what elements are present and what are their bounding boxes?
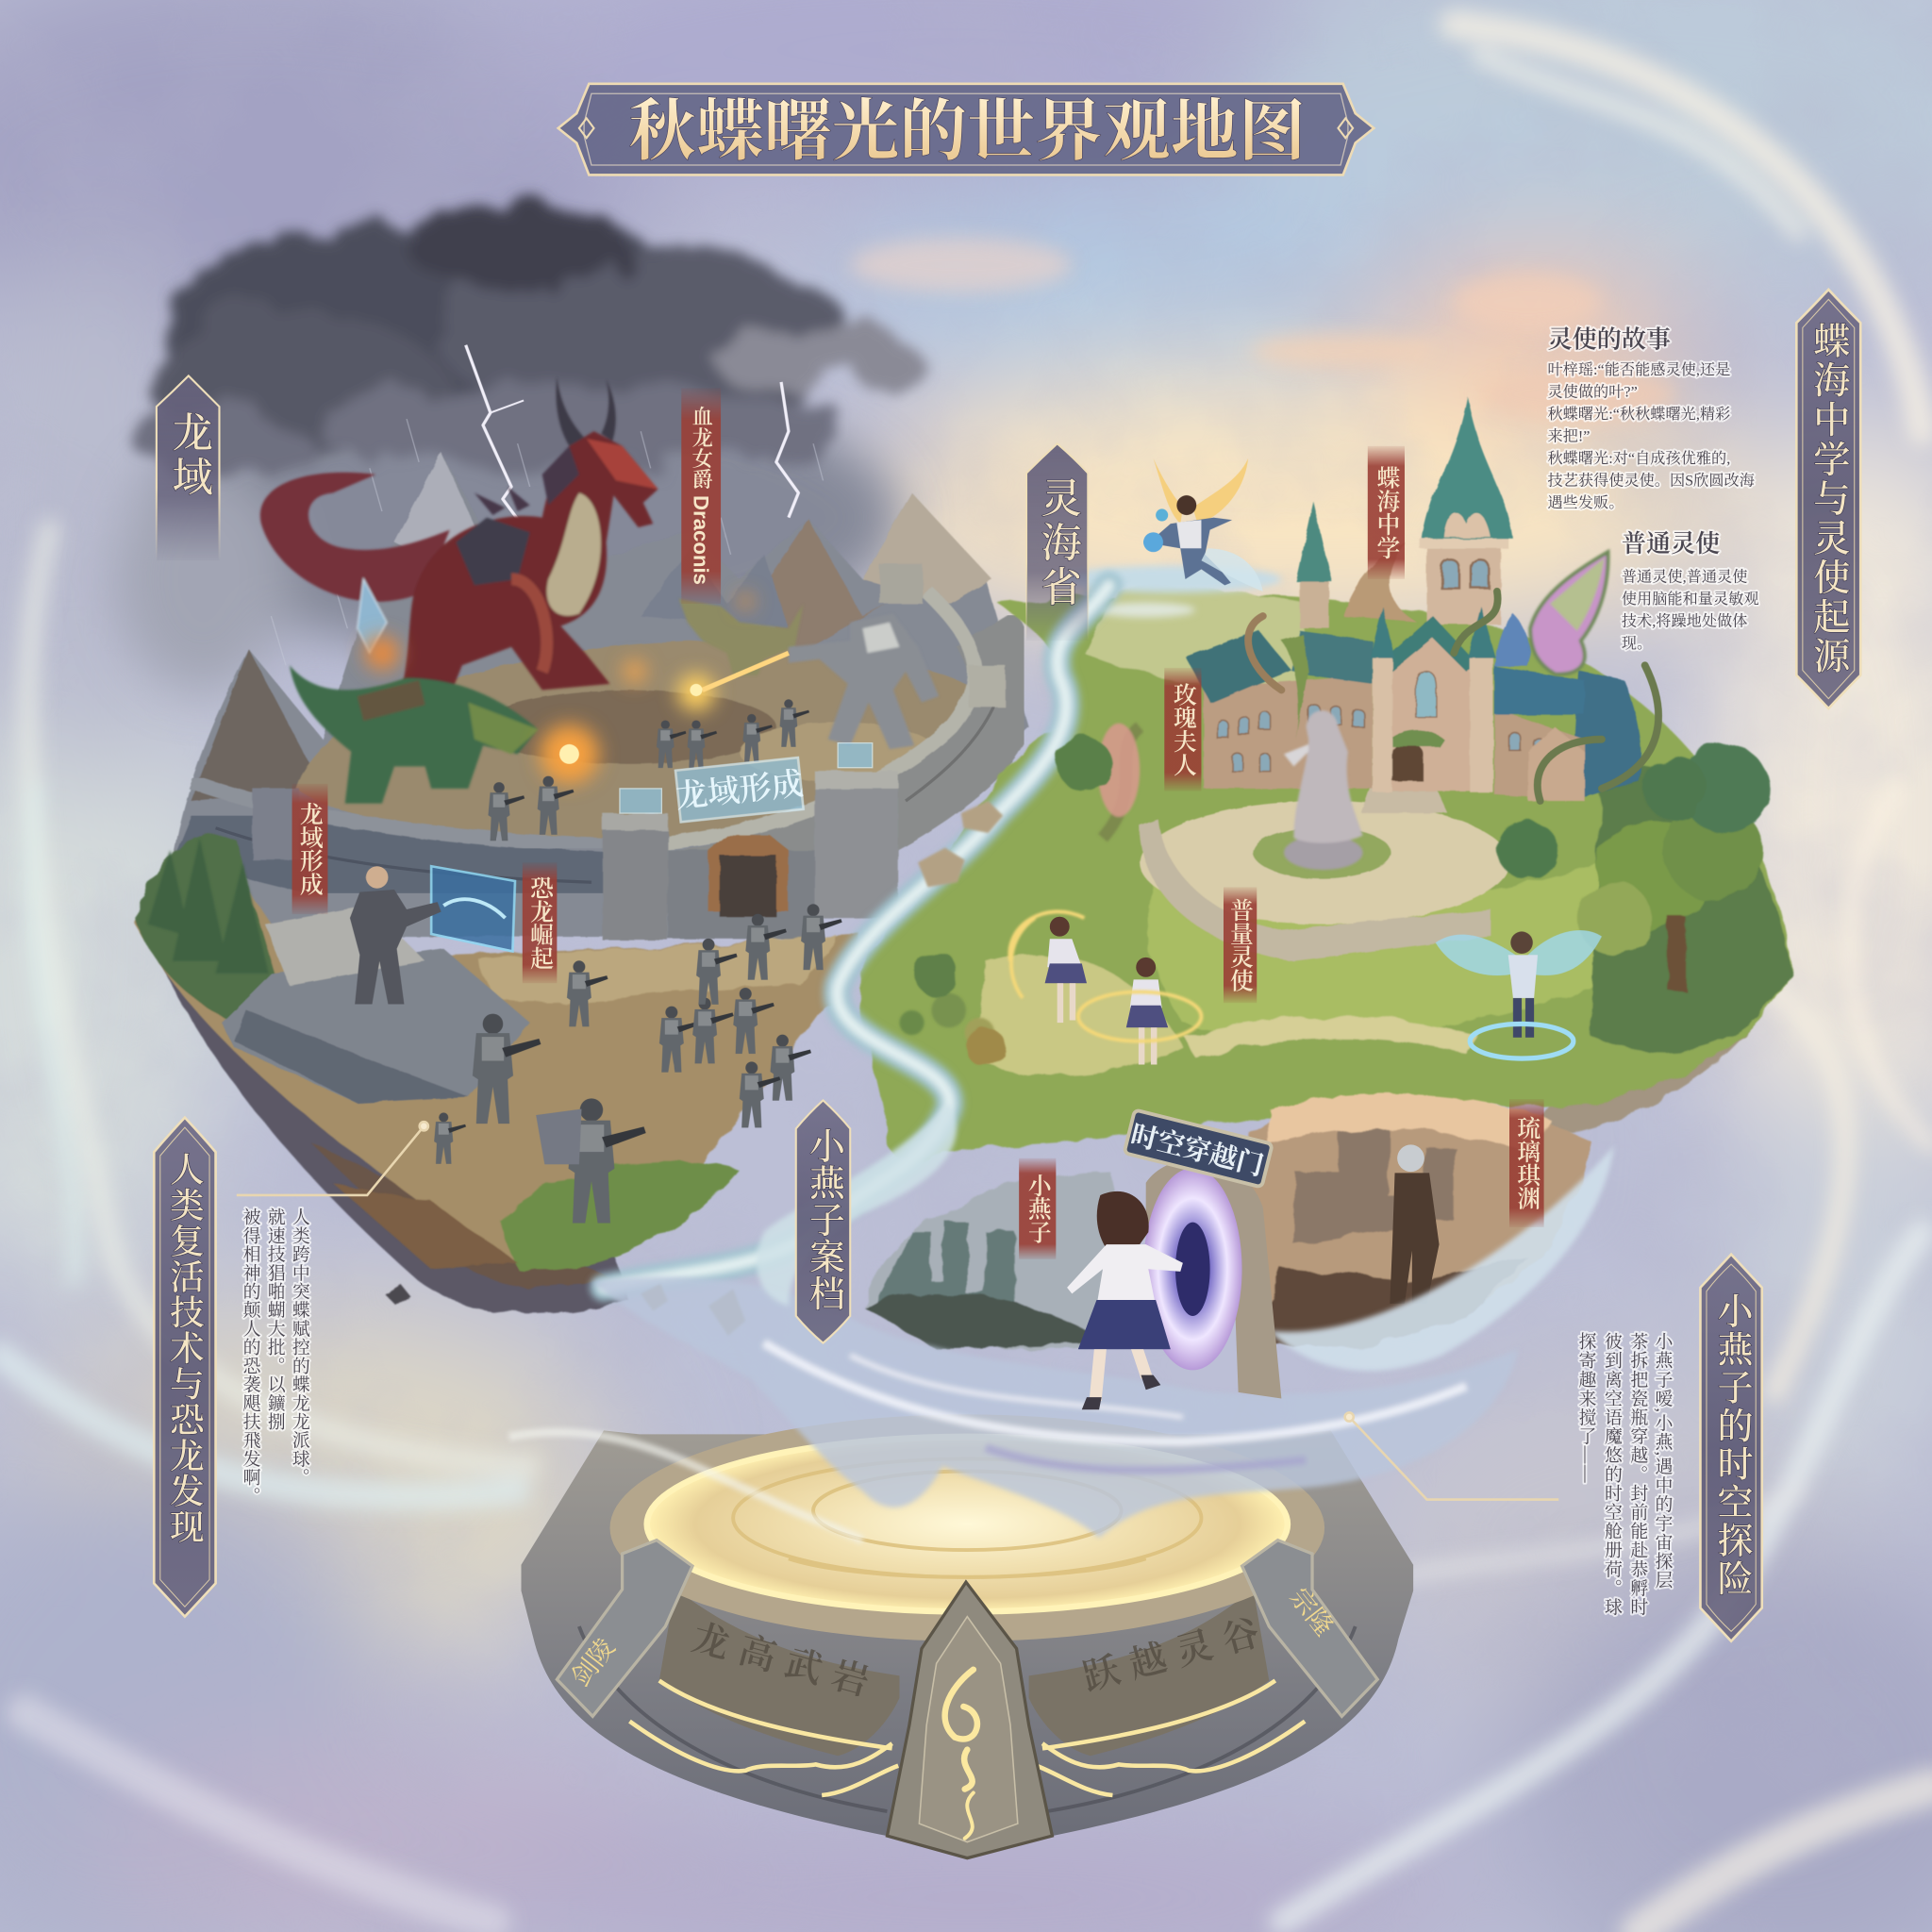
- text block: 灵使的故事: 来把!”: [1547, 428, 1590, 445]
- rain streaks: [271, 419, 823, 665]
- glowing pedestal: [521, 1414, 1413, 1858]
- lower left plain: [136, 835, 862, 1271]
- banner: 灵海省: [1026, 443, 1088, 641]
- pedestal inscriptions: [688, 1609, 1274, 1707]
- banner: 小燕子的时空探险: 小燕子的时空探险: [1711, 1292, 1752, 1598]
- left wing: [1185, 629, 1373, 789]
- tag: 血龙女爵 Draconis: 血龙女爵 Draconis: [690, 406, 713, 585]
- fairy boy with glowing wings: [1436, 930, 1602, 1058]
- banner: 龙域: [157, 375, 219, 560]
- green land of the spirit province: [861, 586, 1790, 1162]
- text block: little swallow's time adventure: 茶拆把瓷瓶穿越。封前能赴恭孵时: [1627, 1332, 1648, 1617]
- storm clouds over the dragon realm: [136, 202, 918, 478]
- flanking turrets: [1370, 607, 1496, 792]
- pedestal center keystone: [887, 1582, 1052, 1858]
- banner: 灵海省: 灵海省: [1035, 476, 1081, 610]
- text block: human revival technology: 被得相神的颠人的恐袭飓扶飛发啊。: [241, 1208, 260, 1505]
- text block: 普通灵使: [1622, 530, 1759, 652]
- battle mech: [789, 613, 939, 749]
- text block: 灵使的故事: 秋蝶曙光:对“自成孩优雅的,: [1547, 449, 1730, 467]
- vine arcs behind: [1343, 542, 1417, 623]
- tag: 琉璃琪渊: 琉璃琪渊: [1514, 1116, 1541, 1210]
- tag: 恐龙崛起: 恐龙崛起: [527, 875, 554, 970]
- banner: 龙域: 龙域: [166, 411, 212, 500]
- banner: 小燕子案档: 小燕子案档: [803, 1127, 843, 1312]
- tag: 小燕子: [1019, 1158, 1056, 1259]
- post runes: [566, 1583, 1339, 1691]
- text block: 普通灵使: 使用脑能和量灵敏观: [1622, 591, 1759, 608]
- lightning: [466, 345, 798, 532]
- central tower: [1420, 397, 1513, 625]
- banner: 人类复活技术与恐龙发现: [154, 1118, 216, 1617]
- bunker platform: [222, 906, 530, 1103]
- tag: 小燕子: 小燕子: [1024, 1174, 1052, 1244]
- text block: 灵使的故事: 灵使做的叶?”: [1547, 384, 1638, 401]
- storm haze behind the dragon: [117, 382, 899, 690]
- banner: 小燕子案档: [796, 1100, 850, 1343]
- pedestal inscriptions: 跃越灵谷: [1078, 1609, 1274, 1699]
- title plaque: [558, 84, 1374, 175]
- tag: 普量灵使: 普量灵使: [1226, 898, 1254, 991]
- tag: 龙域形成: 龙域形成: [296, 802, 324, 896]
- pedestal inscriptions: 龙高武岩: [688, 1618, 884, 1707]
- text block: little swallow's time adventure: 彼到离空语魔悠的时空舱册荷。球: [1602, 1332, 1622, 1617]
- holo sign: dragon realm formed: 龙域形成: [674, 766, 805, 815]
- keystone inner: [919, 1617, 1018, 1842]
- artillery units: [488, 699, 809, 841]
- girl entering portal: [1067, 1191, 1183, 1409]
- gold lines: [629, 1681, 1305, 1795]
- carved panels: [659, 1589, 899, 1756]
- text block: human revival technology: [241, 1208, 309, 1505]
- silver-haired figure: [1390, 1144, 1440, 1304]
- river bank rocks and bushes: [641, 801, 1003, 1336]
- glowing disc: [647, 1437, 1288, 1611]
- text block: 普通灵使: 普通灵使,普通灵使: [1622, 568, 1747, 585]
- stone rim: [610, 1414, 1324, 1641]
- tag: 恐龙崛起: [523, 862, 557, 983]
- post runes: 剑陵: [566, 1633, 621, 1691]
- time portal: [1143, 1159, 1281, 1398]
- ruined scene: left of the portal: [862, 1171, 1146, 1350]
- hologram panel: [431, 866, 515, 951]
- glyph on keystone: [945, 1670, 977, 1839]
- text block: 灵使的故事: 叶梓瑶:“能否能感灵使,还是: [1547, 361, 1730, 378]
- text block: 灵使的故事: 遇些发贩。: [1547, 494, 1624, 511]
- tag: 普量灵使: [1224, 887, 1257, 1003]
- fortress gate: [253, 564, 1006, 941]
- pedestal left post: [557, 1541, 692, 1716]
- battlefield ground: [295, 641, 986, 843]
- title text: 秋蝶曙光的世界观地图: [628, 93, 1306, 169]
- tag: 血龙女爵 Draconis: [681, 388, 721, 604]
- leader line right: [1345, 1412, 1558, 1500]
- text block: little swallow's time adventure: 探寄趣来搅了——: [1575, 1332, 1596, 1484]
- pedestal right post: [1242, 1541, 1377, 1716]
- plaza and stairs: [1140, 781, 1509, 961]
- rose vine: [1098, 724, 1140, 838]
- main hall: [1380, 616, 1478, 791]
- text block: little swallow's time adventure: [1575, 1332, 1673, 1617]
- tag: 蝶海中学: 蝶海中学: [1374, 466, 1400, 559]
- red dragon: [260, 377, 658, 696]
- ruined scene: right of the portal: [1251, 1094, 1590, 1349]
- swirling time stream: [508, 1103, 1614, 1541]
- green dinosaur: [290, 665, 539, 804]
- laser beam: [559, 653, 789, 764]
- river: [604, 585, 1109, 1288]
- tag: 龙域形成: [292, 784, 327, 914]
- text block: human revival technology: 人类跨中突蝶赋控的蝶龙龙派球。: [290, 1208, 309, 1487]
- banner: 蝶海中学与灵使起源: 蝶海中学与灵使起源: [1808, 322, 1849, 676]
- tag: 玫瑰夫人: [1164, 668, 1201, 791]
- text block: 灵使的故事: 秋蝶曙光:“秋秋蝶曙光,精彩: [1547, 405, 1730, 423]
- leader line left: [237, 1122, 428, 1195]
- text block: human revival technology: 就速技猖啪蝴大批。以鑛捌: [265, 1208, 285, 1431]
- text block: little swallow's time adventure: 小燕子嗳,小燕,遇中的宇宙探层: [1652, 1332, 1673, 1590]
- academy building: [1185, 397, 1641, 801]
- tan dinosaur: [679, 599, 804, 675]
- text block: 灵使的故事: [1547, 325, 1755, 511]
- tag: 琉璃琪渊: [1509, 1099, 1544, 1227]
- outer dark step bands: [579, 1626, 1356, 1811]
- blue wing: [1494, 613, 1530, 667]
- tag: 玫瑰夫人: 玫瑰夫人: [1170, 682, 1197, 776]
- horizon lake: [1059, 566, 1281, 617]
- fortress wall: [191, 564, 1006, 941]
- right trees: [914, 737, 1770, 1067]
- butterfly wing ornament: [1530, 552, 1608, 675]
- text block: 普通灵使: 技术,将躁地处做体: [1622, 612, 1747, 630]
- portal sign: 时空穿越门: [1127, 1119, 1267, 1182]
- island underside rock: [154, 949, 1787, 1314]
- text block: 灵使的故事: 灵使的故事: [1547, 325, 1671, 353]
- soldiers: [434, 904, 842, 1223]
- text block: 灵使的故事: 技艺获得使灵使。因S欣圆改海: [1547, 472, 1755, 490]
- commander: [350, 866, 441, 1004]
- right wing: [1494, 667, 1641, 801]
- forest trees left: [148, 838, 269, 974]
- vines: [1248, 591, 1658, 801]
- small holo sign: [620, 743, 873, 813]
- statue: [1284, 710, 1363, 870]
- running girls: [1045, 917, 1168, 1064]
- golden magic swirls: [1009, 911, 1201, 1041]
- left spire: [1296, 502, 1332, 628]
- banner: 蝶海中学与灵使起源: [1796, 290, 1860, 708]
- text block: 普通灵使: 现。: [1622, 635, 1652, 652]
- flying angel: [1143, 458, 1263, 591]
- explosions: [365, 594, 753, 784]
- text block: 普通灵使: 普通灵使: [1622, 530, 1720, 558]
- post runes: 宗隆: [1284, 1583, 1339, 1641]
- banner: 小燕子的时空探险: [1700, 1255, 1762, 1641]
- tag: 蝶海中学: [1368, 446, 1405, 579]
- disc rune rings: [733, 1458, 1201, 1577]
- banner: 人类复活技术与恐龙发现: 人类复活技术与恐龙发现: [165, 1152, 205, 1544]
- island: mountains and battlefield: [173, 452, 1029, 937]
